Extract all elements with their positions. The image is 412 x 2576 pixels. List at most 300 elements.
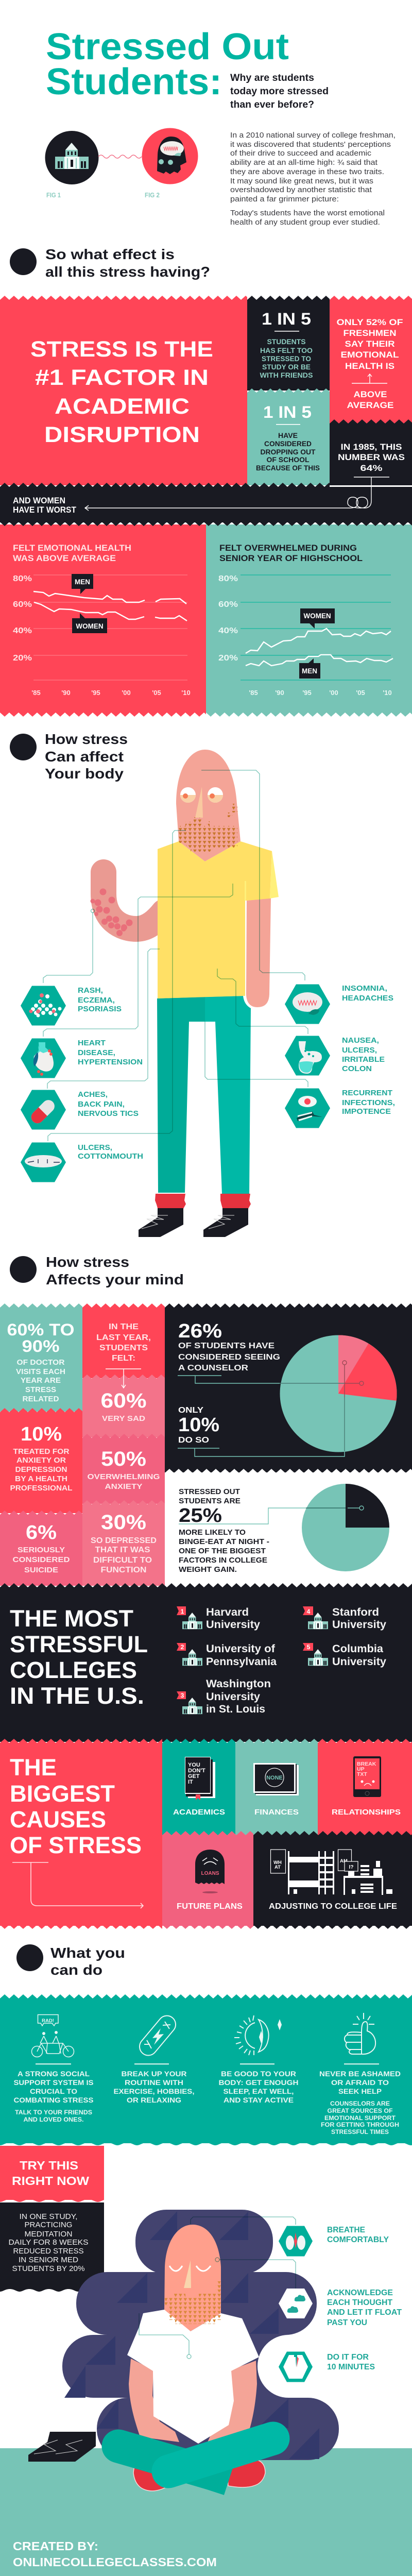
tip 2: break up routine: EXERCISE, HOBBIES, (113, 2087, 195, 2095)
panel: ground and credit: ONLINECOLLEGECLASSES.COM (13, 2555, 217, 2569)
heading: the most stressful colleges: STRESSFUL (10, 1631, 148, 1657)
section heading: how stress can affect your body: Your body (45, 766, 124, 782)
section heading: what you can do: What you (50, 1945, 125, 1961)
panel: and women have it worst: NUMBER WAS (338, 452, 405, 462)
label: breathe (327, 2226, 389, 2244)
panel: biggest causes heading: BIGGEST (10, 1781, 115, 1807)
section heading: what you can do (16, 1944, 125, 1978)
panel: academics (162, 1739, 235, 1835)
panel: finances (235, 1739, 318, 1835)
panel: only 52% of freshmen: ONLY 52% OF (337, 317, 403, 327)
x axis labels: '85 (31, 689, 41, 697)
tip 2: break up routine (113, 2063, 195, 2104)
icon: loans ghost (195, 1850, 225, 1893)
y axis labels: 40% (13, 626, 32, 635)
icon: loans ghost: LOANS (201, 1871, 219, 1876)
panel: academics: ACADEMICS (173, 1808, 225, 1817)
callout: men (72, 574, 93, 594)
panel: 10% treated: BY A HEALTH (15, 1475, 67, 1483)
panel: meditation study: IN ONE STUDY, (20, 2212, 77, 2221)
label: nausea: NAUSEA, (342, 1036, 379, 1045)
panel: 50% overwhelming anxiety: OVERWHELMING (88, 1472, 160, 1481)
hexagon: timer (279, 2351, 313, 2382)
pie chart: binge eating (302, 1484, 389, 1571)
x axis labels: '90 (61, 689, 71, 697)
panel: counselor stat with pie chart: A COUNSELOR (178, 1364, 249, 1372)
panel: biggest causes heading: CAUSES (10, 1806, 106, 1833)
x axis labels: '90 (275, 689, 284, 697)
panel: 10% treated: DEPRESSION (15, 1466, 67, 1474)
label: recurrent infections (342, 1089, 395, 1116)
label: acknowledge: AND LET IT FLOAT (327, 2308, 402, 2317)
label: nausea: IRRITABLE (342, 1055, 385, 1064)
college 4: Stanford: University (332, 1619, 386, 1631)
panel: stress is the #1 factor (0, 296, 247, 485)
panel: stress is the #1 factor: STRESS IS THE (30, 337, 213, 362)
panel: binge-eat stat with pie chart: STUDENTS ARE (179, 1497, 241, 1505)
label: acknowledge: ACKNOWLEDGE (327, 2289, 393, 2297)
icon: book: GET (188, 1773, 200, 1780)
y axis labels: 20% (218, 654, 238, 663)
x axis labels: '95 (302, 689, 312, 697)
panel: 6% suicide: SUICIDE (24, 1566, 58, 1574)
label: rash: PSORIASIS (78, 1005, 122, 1013)
section heading: So what effect: So what effect is (45, 246, 175, 262)
intro paragraph: it was discovered that students' perceptions (230, 141, 391, 149)
panel: 1 in 5 too stressed: HAS FELT TOO (260, 347, 313, 354)
chart title: felt overwhelmed: SENIOR YEAR OF HIGHSCHOOL (219, 553, 363, 563)
subtitle question: than ever before? (230, 99, 314, 110)
icon: banknotes (253, 1763, 299, 1795)
tip 4: seek help: NEVER BE ASHAMED (319, 2070, 401, 2078)
label: rash (78, 986, 122, 1013)
intro paragraph: Today's students have the worst emotional (230, 209, 385, 217)
poster: what (271, 1850, 285, 1873)
intro paragraph (230, 131, 396, 227)
college 2: University of Pennsylvania: University of (206, 1643, 276, 1655)
panel: biggest causes heading (0, 1739, 162, 1929)
illustration: meditating student (28, 2225, 273, 2491)
panel: most stressful colleges (0, 1583, 412, 1742)
crossed legs and socks (118, 2438, 273, 2491)
icon: book: DON'T (188, 1768, 205, 1774)
section heading: So what effect: all this stress having? (45, 264, 210, 280)
x axis labels: '00 (122, 689, 131, 697)
y axis labels: 40% (218, 626, 238, 635)
panel: and women have it worst: IN 1985, THIS (341, 442, 402, 452)
panel: and women have it worst: HAVE IT WORST (13, 505, 77, 515)
intro paragraph: ability are at an all-time high: ¾ said that (230, 159, 377, 167)
college 5: Columbia: 5 (307, 1643, 311, 1651)
panel: binge-eat stat with pie chart: STRESSED OUT (179, 1487, 240, 1496)
panel: counselor stat with pie chart: ONLY (178, 1406, 203, 1415)
panel: 1 in 5 considered dropping out: OF SCHOOL (267, 456, 309, 464)
college 4: Stanford: 4 (307, 1608, 311, 1615)
panel: 60% very sad (82, 1369, 165, 1437)
panel: and women have it worst (0, 419, 412, 526)
connector lines on meditating student (139, 2217, 296, 2359)
panel: binge-eat stat with pie chart (165, 1472, 412, 1586)
figure 1: school in black circle: FIG 1 (46, 191, 61, 199)
tip 2: break up routine: ROUTINE WITH (125, 2078, 183, 2087)
chart title: felt emotional health: FELT EMOTIONAL HEALTH (13, 543, 131, 553)
panel: 60% to 90% doctor visits: OF DOCTOR (16, 1359, 65, 1367)
label: ulcers (78, 1143, 143, 1161)
icon: phone (353, 1756, 381, 1797)
panel: in the last year students felt: STUDENTS (99, 1344, 148, 1352)
panel: binge-eat stat with pie chart: FACTORS IN COLLEGE (179, 1556, 267, 1565)
panel: in the last year students felt (82, 1303, 165, 1378)
y axis labels: 60% (218, 600, 238, 609)
panel: in the last year students felt: IN THE (109, 1323, 139, 1331)
panel: 60% to 90% doctor visits (0, 1303, 82, 1412)
panel: 60% to 90% doctor visits: RELATED (23, 1395, 59, 1403)
panel: counselor stat with pie chart: CONSIDERED SEEING (178, 1353, 280, 1362)
icon: phone: BREAK (357, 1761, 376, 1767)
panel: binge-eat stat with pie chart: 25% (179, 1505, 222, 1527)
panel: try this right now: TRY THIS (20, 2159, 78, 2172)
icon: tandem bicycle: RAD! (42, 2018, 54, 2024)
tip 4: seek help: GREAT SOURCES OF (328, 2108, 392, 2114)
panel: 60% to 90% doctor visits: 60% TO (7, 1320, 74, 1339)
panel: 30% so depressed (82, 1500, 165, 1586)
panel: emotional health chart (0, 522, 412, 717)
illustration: purple thought cloud (62, 2210, 412, 2460)
label: recurrent infections: IMPOTENCE (342, 1107, 391, 1116)
illustration: standing stressed student (91, 750, 279, 1237)
panel: counselor stat with pie chart: DO SO (178, 1436, 209, 1445)
shoes beside student (28, 2432, 96, 2462)
label: breathe: COMFORTABLY (327, 2235, 389, 2244)
panel: only 52% of freshmen: HEALTH IS (345, 361, 394, 371)
y axis labels (218, 574, 238, 663)
panel: 1 in 5 considered dropping out (247, 388, 330, 485)
panel: biggest causes heading: THE (10, 1754, 57, 1781)
label: acknowledge (327, 2289, 402, 2327)
tip 2: break up routine: BREAK UP YOUR (122, 2070, 186, 2078)
panel: 1 in 5 too stressed: STUDY OR BE (262, 363, 311, 371)
right arm (246, 898, 271, 1007)
panel: overwhelmed chart (0, 522, 412, 717)
y axis labels: 80% (13, 574, 32, 583)
college 3: Washington University (177, 1678, 271, 1715)
panel: 10% treated: 10% (21, 1423, 62, 1445)
x axis labels: '00 (329, 689, 338, 697)
white shirt (127, 2310, 259, 2444)
panel: 1 in 5 too stressed: STUDENTS (267, 338, 306, 346)
x axis labels (31, 689, 191, 697)
panel: 1 in 5 considered dropping out: 1 IN 5 (263, 403, 312, 421)
label: breathe: BREATHE (327, 2226, 365, 2234)
panel: relationships: RELATIONSHIPS (332, 1808, 401, 1817)
college 1: Harvard: Harvard (206, 1606, 249, 1618)
yellow t-shirt (158, 841, 279, 998)
tip 1: social support: CRUCIAL TO (30, 2087, 77, 2095)
label: aches (78, 1090, 139, 1118)
label: heart: HEART (78, 1039, 106, 1047)
intro paragraph: In a 2010 national survey of college freshman, (230, 131, 396, 140)
college 2: University of Pennsylvania: Pennsylvania (206, 1656, 277, 1668)
heading: the most stressful colleges (10, 1605, 148, 1709)
intro paragraph: painted a far grimmer picture: (230, 195, 339, 204)
tip 1: social support: TALK TO YOUR FRIENDS (15, 2110, 92, 2116)
panel: try this right now: RIGHT NOW (12, 2174, 89, 2188)
section heading: So what effect (10, 246, 210, 280)
trousers (157, 996, 251, 1194)
panel: only 52% of freshmen (330, 296, 412, 423)
panel: meditation study: STUDENTS BY 20% (12, 2264, 84, 2273)
chart title: felt emotional health (13, 543, 131, 563)
line: men (246, 655, 393, 666)
callout: women (300, 608, 335, 629)
icon: phone: TXT (357, 1771, 367, 1777)
college 3: Washington University: Washington (206, 1678, 271, 1690)
label: insomnia: HEADACHES (342, 994, 393, 1003)
hexagon: lungs (279, 2226, 313, 2257)
label: heart (78, 1039, 143, 1066)
tip 4: seek help: EMOTIONAL SUPPORT (324, 2115, 396, 2122)
panel: 1 in 5 too stressed: WITH FRIENDS (260, 371, 313, 379)
x axis labels: '95 (91, 689, 100, 697)
poster: what: WH (273, 1860, 282, 1866)
college 3: Washington University: 3 (181, 1692, 184, 1699)
tip 4: seek help: COUNSELORS ARE (330, 2101, 390, 2107)
panel: 30% so depressed: FUNCTION (101, 1566, 146, 1574)
label: ulcers: COTTONMOUTH (78, 1152, 143, 1161)
tip 1: social support (13, 2063, 94, 2123)
intro paragraph: It may sound like great news, but it was (230, 177, 373, 185)
panel: adjusting to college life (253, 1831, 412, 1929)
icon: banknotes: NONE (266, 1775, 283, 1781)
wavy connector between figures (98, 155, 142, 158)
head (176, 750, 241, 861)
section heading: how stress can affect your body: How stress (45, 731, 128, 747)
callout: men: MEN (302, 667, 317, 675)
label: nausea (342, 1036, 385, 1073)
label: nausea: COLON (342, 1064, 372, 1073)
panel: 6% suicide: CONSIDERED (12, 1555, 70, 1564)
tip 4: seek help: SEEK HELP (338, 2087, 382, 2095)
panel: 60% very sad: 60% (101, 1389, 146, 1412)
icon: dorm room (288, 1851, 392, 1895)
label: heart: DISEASE, (78, 1048, 115, 1057)
y axis labels: 60% (13, 600, 32, 609)
panel: binge-eat stat with pie chart: MORE LIKELY TO (179, 1528, 246, 1537)
panel: only 52% of freshmen: EMOTIONAL (341, 350, 399, 360)
label: ten minutes: 10 MINUTES (327, 2363, 375, 2371)
chart title: felt overwhelmed: FELT OVERWHELMED DURING (219, 543, 357, 553)
poster and monitor: am I? (338, 1850, 358, 1876)
tip 3: be good to your body: BODY: GET ENOUGH (218, 2078, 299, 2087)
raised arm with rash (91, 872, 164, 936)
label: acknowledge: PAST YOU (327, 2318, 367, 2327)
label: rash: RASH, (78, 986, 103, 995)
panel: 60% very sad: VERY SAD (102, 1414, 145, 1423)
panel: 10% treated: PROFESSIONAL (10, 1484, 73, 1493)
panel: 10% treated: TREATED FOR (13, 1448, 70, 1456)
tip 1: social support: AND LOVED ONES. (24, 2117, 83, 2123)
subtitle question: today more stressed (230, 86, 329, 97)
panel: stress is the #1 factor: #1 FACTOR IN (35, 365, 209, 390)
panel: 6% suicide: 6% (26, 1522, 57, 1544)
label: ten minutes: DO IT FOR (327, 2353, 369, 2362)
panel: 10% treated (0, 1408, 82, 1513)
label: aches: BACK PAIN, (78, 1100, 125, 1109)
college 1: Harvard (177, 1606, 260, 1631)
college 2: University of Pennsylvania (177, 1643, 277, 1668)
line: women (34, 602, 187, 621)
heading: the most stressful colleges: COLLEGES (10, 1657, 137, 1683)
panel: in the last year students felt: FELT: (112, 1354, 135, 1363)
college 2: University of Pennsylvania: 2 (181, 1643, 184, 1651)
label: insomnia: INSOMNIA, (342, 984, 387, 993)
label: nausea: ULCERS, (342, 1046, 377, 1055)
panel: 60% to 90% doctor visits: STRESS (25, 1386, 56, 1394)
panel: meditation study: REDUCED STRESS (13, 2247, 83, 2256)
beard (165, 2281, 221, 2324)
panel: 30% so depressed: DIFFICULT TO (93, 1556, 152, 1565)
panel: 50% overwhelming anxiety: ANXIETY (105, 1482, 142, 1491)
college 5: Columbia (303, 1643, 386, 1668)
college 1: Harvard: University (206, 1619, 260, 1631)
icon: book: YOU (188, 1762, 200, 1768)
panel: meditation study: PRACTICING (25, 2221, 72, 2229)
panel: and women have it worst: AND WOMEN (13, 496, 65, 505)
label: recurrent infections: RECURRENT (342, 1089, 392, 1097)
panel: counselor stat with pie chart: OF STUDENTS HAVE (178, 1342, 274, 1350)
intro paragraph: of their drive to succeed and academic (230, 149, 371, 158)
pie chart: counselor (280, 1335, 397, 1452)
panel: meditation study (0, 2199, 104, 2292)
hexagon: thoughts as clouds (279, 2289, 313, 2318)
panel: 1 in 5 considered dropping out: DROPPING OUT (261, 448, 316, 456)
label: aches: NERVOUS TICS (78, 1109, 139, 1118)
nose (184, 2260, 191, 2288)
panel: ground and credit: CREATED BY: (13, 2539, 98, 2553)
panel: 10% treated: ANXIETY OR (16, 1456, 66, 1465)
heading: the most stressful colleges: THE MOST (10, 1605, 133, 1632)
title: Stressed Out Students (46, 26, 289, 103)
tip 2: break up routine: OR RELAXING (127, 2096, 181, 2104)
panel: 1 in 5 considered dropping out: BECAUSE OF THIS (256, 464, 320, 472)
y axis labels: 20% (13, 654, 32, 663)
panel: counselor stat with pie chart: 26% (178, 1320, 222, 1342)
hexagon: rash (21, 986, 66, 1025)
chart title: felt emotional health: WAS ABOVE AVERAGE (13, 553, 116, 563)
tip 4: seek help: STRESSFUL TIMES (331, 2129, 389, 2136)
label: insomnia (342, 984, 393, 1003)
y axis labels (13, 574, 32, 663)
panel: relationships (318, 1739, 412, 1835)
hexagon: brain (285, 984, 330, 1024)
panel: 50% overwhelming anxiety: 50% (101, 1448, 146, 1470)
head (164, 2225, 221, 2331)
panel: 50% overwhelming anxiety (82, 1434, 165, 1504)
connector lines from body to hexagons (43, 770, 308, 1141)
eyes (180, 787, 223, 803)
x axis labels (249, 689, 392, 697)
panel: counselor stat with pie chart (165, 1303, 412, 1473)
x axis labels: '10 (383, 689, 392, 697)
label: ulcers: ULCERS, (78, 1143, 112, 1152)
panel: 60% to 90% doctor visits: 90% (22, 1337, 60, 1355)
tip 3: be good to your body: SLEEP, EAT WELL, (224, 2087, 294, 2095)
section heading: how stress affects your mind: How stress (46, 1254, 129, 1270)
icon: thumbs up (345, 2013, 375, 2054)
panel: adjusting to college life: ADJUSTING TO COLLEGE LIFE (269, 1902, 397, 1911)
section heading: how stress affects your mind (10, 1254, 184, 1287)
panel: 30% so depressed: THAT IT WAS (95, 1546, 150, 1554)
college 5: Columbia: Columbia (332, 1643, 383, 1655)
college 5: Columbia: University (332, 1656, 386, 1668)
panel: meditation study: MEDITATION (25, 2230, 72, 2239)
panel: counselor stat with pie chart: 10% (178, 1414, 219, 1436)
intro paragraph: they are above average in these two traits. (230, 168, 384, 176)
intro paragraph: health of any student group ever studied. (230, 218, 380, 227)
figure 1: school in black circle (45, 131, 99, 199)
hexagon: eye and teeth (285, 1088, 330, 1128)
chart title: felt overwhelmed (219, 543, 363, 563)
panel: ground and credit (0, 2448, 412, 2576)
panel: 30% so depressed: SO DEPRESSED (91, 1536, 157, 1545)
panel: biggest causes heading: OF STRESS (10, 1832, 142, 1858)
college 3: Washington University: University (206, 1691, 260, 1703)
section heading: how stress can affect your body: Can affect (45, 749, 124, 765)
college 4: Stanford: Stanford (332, 1606, 379, 1618)
tip 1: social support: COMBATING STRESS (13, 2096, 94, 2104)
x axis labels: '10 (181, 689, 191, 697)
panel: only 52% of freshmen: SAY THEIR (345, 339, 394, 349)
poster and monitor: am I?: I? (349, 1865, 353, 1870)
panel: 1 in 5 too stressed (247, 296, 330, 391)
panel: binge-eat stat with pie chart: BINGE-EAT AT NIGHT - (179, 1537, 269, 1546)
panel: future plans: FUTURE PLANS (177, 1902, 243, 1911)
panel: 6% suicide: SERIOUSLY (18, 1546, 65, 1554)
label: heart: HYPERTENSION (78, 1058, 143, 1066)
tip 1: social support: SUPPORT SYSTEM IS (13, 2078, 94, 2087)
subtitle question: Why are students (230, 73, 314, 83)
college 3: Washington University: in St. Louis (206, 1703, 265, 1715)
socks and shoes (139, 1194, 251, 1237)
panel: binge-eat stat with pie chart: ONE OF THE BIGGEST (179, 1547, 266, 1555)
section heading: how stress affects your mind: Affects your mind (46, 1272, 184, 1287)
tip 4: seek help (319, 2063, 401, 2136)
tip 1: social support: A STRONG SOCIAL (18, 2070, 90, 2078)
section heading: how stress can affect your body (10, 731, 128, 782)
callout: women (72, 613, 107, 633)
panel: binge-eat stat with pie chart: WEIGHT GAIN. (179, 1565, 237, 1574)
label: ten minutes (327, 2353, 375, 2371)
panel: only 52% of freshmen: FRESHMEN (343, 328, 397, 338)
panel: what you can do tips (0, 1994, 412, 2146)
panel: 1 in 5 considered dropping out: CONSIDERED (264, 440, 312, 448)
icon: skateboard (136, 2012, 179, 2059)
panel: only 52% of freshmen: AVERAGE (347, 400, 393, 410)
figure 2: skull in red circle: FIG 2 (145, 191, 160, 199)
tip 3: be good to your body (218, 2063, 299, 2104)
panel: in the last year students felt: LAST YEAR, (96, 1333, 151, 1342)
callout: men (299, 658, 320, 679)
tip 4: seek help: FOR GETTING THROUGH (321, 2122, 399, 2128)
x axis labels: '05 (152, 689, 161, 697)
x axis labels: '05 (356, 689, 365, 697)
heading: the most stressful colleges: IN THE U.S. (10, 1683, 144, 1709)
panel: 6% suicide (0, 1511, 82, 1586)
callout: women: WOMEN (76, 622, 104, 630)
figure 2: skull in red circle (142, 128, 198, 199)
label: recurrent infections: INFECTIONS, (342, 1098, 395, 1107)
panel: 30% so depressed: 30% (101, 1511, 146, 1534)
